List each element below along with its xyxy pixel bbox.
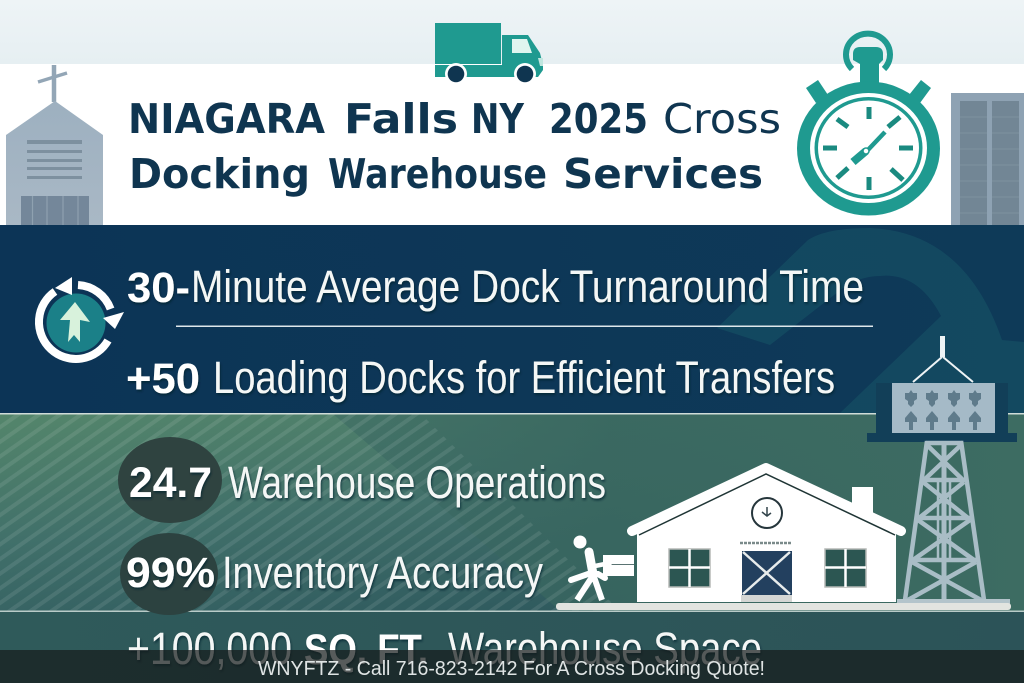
metric: warehouse operations: 24.7: [129, 459, 212, 507]
title: Docking: [129, 150, 310, 198]
icon: stopwatch: [797, 34, 940, 215]
metric: warehouse space: [127, 623, 762, 674]
footer bar: WNYFTZ - Call 716-823-2142 For A Cross Docking Quote!: [258, 658, 765, 680]
icon: grey building: [951, 93, 1024, 225]
panel: dock metrics background: [0, 225, 1024, 413]
title: NY: [471, 95, 525, 143]
title: Falls: [344, 95, 458, 143]
title panel background: [0, 64, 1024, 225]
metric: dock turnaround: 30-: [127, 264, 190, 312]
icon: delivery truck: [435, 23, 543, 85]
metric: inventory accuracy: Inventory Accuracy: [222, 547, 543, 598]
metric: loading docks: Loading Docks for Efficient Transfers: [213, 352, 835, 403]
metric: warehouse space: SQ. FT.: [304, 626, 428, 674]
icon: cycle arrows: [39, 277, 124, 359]
ground line: [556, 603, 1011, 610]
metric: warehouse operations: Warehouse Operations: [228, 457, 606, 508]
sky band: [0, 0, 1024, 64]
title: 2025: [549, 95, 648, 143]
title: [128, 95, 781, 198]
title: Services: [563, 150, 763, 198]
icon: church building: [6, 65, 103, 225]
metric: inventory accuracy: 99%: [126, 549, 215, 597]
metric: inventory accuracy: [120, 533, 543, 615]
title: Cross: [663, 95, 781, 143]
metric: warehouse space: Warehouse Space: [448, 623, 762, 674]
title: NIAGARA: [128, 95, 325, 143]
metric: warehouse space: +100,000: [127, 623, 292, 674]
footer bar: [0, 650, 1024, 683]
metric: dock turnaround: Minute Average Dock Turnaround Time: [191, 261, 864, 312]
icon: water tower: [867, 336, 1017, 604]
metric: loading docks: +50: [126, 355, 200, 403]
icon: worker carrying box: [571, 536, 634, 600]
panel: warehouse metrics background: [0, 413, 1024, 683]
icon: warehouse house: [632, 468, 901, 602]
metric: warehouse operations: [118, 437, 606, 523]
title: Warehouse: [328, 150, 547, 198]
